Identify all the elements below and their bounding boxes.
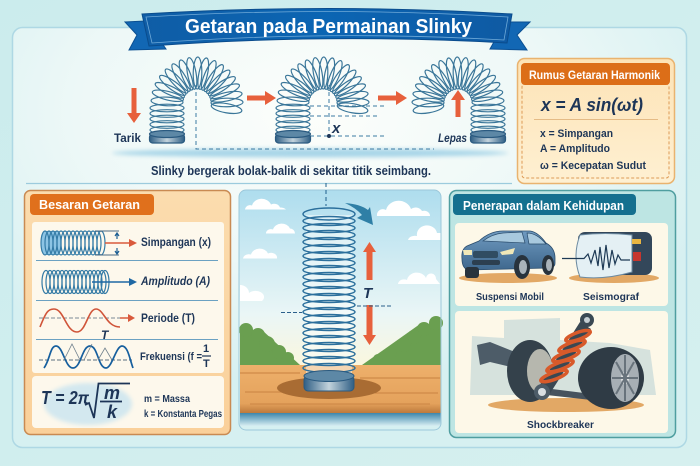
label: periode: Periode (T) [141,311,195,325]
curved arrow [345,203,373,225]
main formula: x = A sin(ωt) [540,95,643,115]
ground shadow [112,148,508,158]
guide dashes [281,306,393,312]
label: simpangan: Simpangan (x) [141,235,211,249]
clouds [240,199,441,301]
water strip [240,413,441,426]
title: Getaran pada Permainan Slinky [185,16,473,38]
arrow: pull down [127,88,141,123]
shock body [538,322,591,395]
row: frekuensi [39,343,211,370]
definition A: A = Amplitudo [540,143,610,155]
formula header [521,63,670,85]
label: T: T [363,285,374,302]
fraction: 1 [203,343,209,355]
bottom card [455,311,668,433]
right tyre [578,347,644,409]
title banner [125,8,530,50]
fraction [202,343,211,370]
arrow: right 1 [247,91,276,105]
banner body [142,8,512,46]
panel: formula [518,58,674,184]
arrow: right 2 [378,91,407,105]
equilibrium point [327,134,331,138]
icon: seismograph [562,232,659,283]
period formula card [32,376,224,428]
top card [455,223,668,306]
definition m: m = Massa [144,394,190,405]
tall slinky [303,183,355,391]
label: amplitudo: Amplitudo (A) [140,274,210,288]
guide lines [196,85,434,149]
label: frekuensi: Frekuensi (f = [140,351,202,363]
applications header [453,194,636,215]
row: periode [39,309,195,342]
slinky: middle [276,57,369,143]
label: T: T [101,328,110,342]
definition omega: ω = Kecepatan Sudut [540,160,646,172]
quantities header [30,194,154,215]
row: simpangan [41,231,211,255]
fraction: T [203,358,210,370]
panel: applications [450,190,676,438]
icon: car [459,231,557,283]
slinky: pulled [150,57,243,143]
panel outline [239,190,441,430]
label: x: x [331,120,341,137]
panel divider [26,182,512,184]
formula left: T = 2π [41,388,89,408]
label: suspensi mobil: Suspensi Mobil [476,291,544,303]
label: Tarik: Tarik [114,131,141,145]
slinky: released [412,57,506,143]
axle [477,342,515,368]
label: seismograf: Seismograf [583,291,639,303]
header text: Besaran Getaran [39,197,140,212]
definition k: k = Konstanta Pegas [144,409,222,420]
amplitude arrow up [363,242,376,280]
trees left [239,323,300,365]
row: amplitudo [42,270,210,294]
banner right tail [490,22,530,50]
radical [85,384,130,418]
numerator: m [104,383,120,403]
definition x: x = Simpangan [540,128,613,140]
caption: Slinky bergerak bolak-balik di sekitar titik seimbang. [151,163,431,178]
denominator: k [107,402,118,422]
amplitude arrow down [363,305,376,345]
panel: main slinky scene [239,183,443,430]
slinky demonstration [114,57,506,178]
header text: Penerapan dalam Kehidupan [463,199,624,213]
spring shadow [277,377,381,399]
quantities card [32,222,224,373]
banner left tail [125,21,166,50]
icon: shock absorber [470,313,656,412]
panel: quantities [24,190,230,434]
arrow: up [451,90,465,117]
label: shockbreaker: Shockbreaker [527,419,594,431]
header text: Rumus Getaran Harmonik [529,68,660,82]
trees right [362,316,443,365]
label: Lepas: Lepas [438,131,467,145]
shock spring [540,328,591,384]
left tyre [507,340,553,402]
wood table [240,365,441,413]
